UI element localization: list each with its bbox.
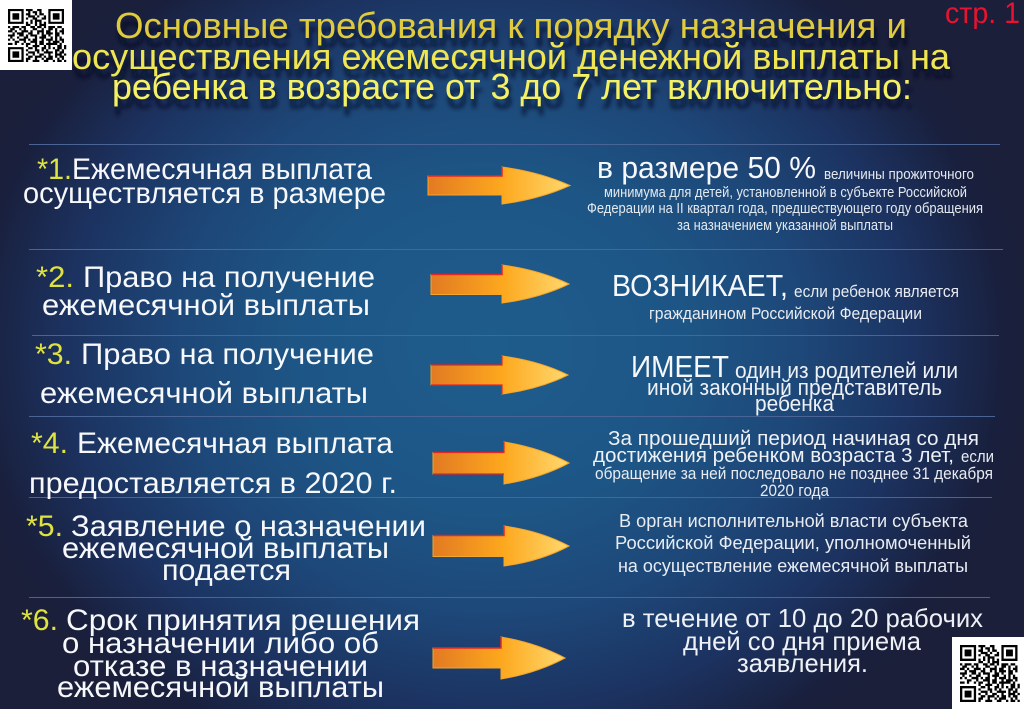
row 4 value: 2020 года <box>760 481 829 500</box>
row 2 value <box>612 268 959 323</box>
row 1 value: в размере 50 % <box>597 150 816 185</box>
row 6 <box>21 603 983 704</box>
row 5 label: ежемесячной выплаты <box>62 532 389 565</box>
row 1 value <box>587 150 983 234</box>
row 1 arrow <box>428 167 570 204</box>
row 5 label: подается <box>162 554 291 587</box>
row 2 <box>36 261 959 323</box>
row 6 label: *6. <box>21 604 58 637</box>
row 6 arrow <box>433 637 565 679</box>
title: ребенка в возрасте от 3 до 7 лет включительно: <box>112 66 912 107</box>
row 6 label: ежемесячной выплаты <box>57 671 384 704</box>
row 3 <box>35 338 958 416</box>
row 1 label: *1. <box>37 153 72 186</box>
row 1 value: величины прожиточного <box>824 167 974 183</box>
row 4 label: предоставляется в 2020 г. <box>29 467 397 500</box>
row 4 label <box>29 427 397 500</box>
row 5 value: В орган исполнительной власти субъекта <box>619 511 969 531</box>
row 5 value: Российской Федерации, уполномоченный <box>615 533 971 553</box>
row 2 value: ВОЗНИКАЕТ, <box>612 268 788 303</box>
row 5 label: Заявление о назначении <box>71 510 426 543</box>
row 6 value: заявления. <box>737 648 868 678</box>
row 2 label <box>36 261 375 322</box>
row 3 value <box>631 349 958 416</box>
row 4 label: Ежемесячная выплата <box>77 427 393 460</box>
row 3 label: Право на получение <box>81 338 374 371</box>
row 4 arrow <box>433 442 569 484</box>
row 5 label: *5. <box>26 510 63 543</box>
row 6 label: отказе в назначении <box>73 650 368 683</box>
row 5 arrow <box>433 526 569 566</box>
row 5 <box>26 510 971 587</box>
row 6 label <box>21 604 420 704</box>
row 1 value: Федерации на II квартал года, предшествующего году обращения <box>587 201 983 217</box>
row 4 value <box>593 428 994 500</box>
row 3 label: *3. <box>35 338 72 371</box>
QR code: top left <box>0 0 72 70</box>
row 2 label: Право на получение <box>83 261 375 294</box>
row 5 value <box>615 511 971 576</box>
row 3 value: один из родителей или <box>735 358 958 383</box>
row 3 label: ежемесячной выплаты <box>40 377 368 410</box>
row 6 value: дней со дня приема <box>683 626 922 656</box>
row 4 value: обращение за ней последовало не позднее 31 декабря <box>595 464 993 483</box>
row 4 value: достижения ребенком возраста 3 лет, <box>593 445 954 467</box>
row 5 value: на осуществление ежемесячной выплаты <box>618 556 968 576</box>
row 1 label: осуществляется в размере <box>23 177 386 210</box>
row 1 value: минимума для детей, установленной в субъекте Российской <box>604 185 967 201</box>
row 6 value: в течение от 10 до 20 рабочих <box>622 603 983 633</box>
row 4 value: если <box>961 447 994 466</box>
row 3 label <box>35 338 374 410</box>
row 3 arrow <box>431 356 568 394</box>
title: осуществления ежемесячной денежной выплаты на <box>72 36 951 77</box>
row 4 <box>29 427 994 500</box>
QR code: bottom right <box>952 637 1024 709</box>
row 2 arrow <box>431 265 569 303</box>
row 2 value: если ребенок является <box>794 283 959 301</box>
row 5 label <box>26 510 426 587</box>
title <box>72 5 951 107</box>
row 1 label <box>23 153 386 210</box>
row 4 value: За прошедший период начиная со дня <box>608 428 979 450</box>
row 1 label: Ежемесячная выплата <box>72 153 372 186</box>
row 3 value: иной законный представитель <box>647 375 942 400</box>
row 2 label: ежемесячной выплаты <box>42 289 370 322</box>
row 1 <box>23 150 983 234</box>
row 2 value: гражданином Российской Федерации <box>649 305 922 323</box>
row 4 label: *4. <box>31 427 68 460</box>
row 3 value: ИМЕЕТ <box>631 349 729 384</box>
row 1 value: за назначением указанной выплаты <box>677 218 893 234</box>
row 6 value <box>622 603 983 678</box>
row 6 label: о назначении либо об <box>62 627 379 660</box>
title: Основные требования к порядку назначения и <box>115 5 907 46</box>
row 3 value: ребенка <box>755 391 835 416</box>
row 6 label: Срок принятия решения <box>66 604 420 637</box>
row 2 label: *2. <box>36 261 74 294</box>
